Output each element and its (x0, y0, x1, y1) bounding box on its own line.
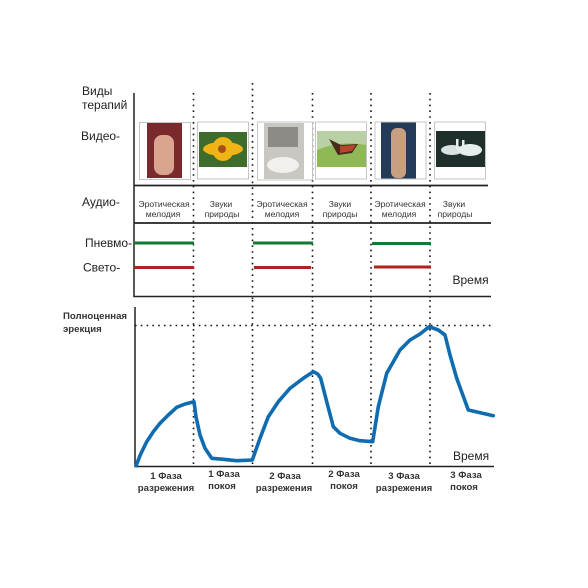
phase labels: разрежения (256, 483, 312, 494)
thumbnail 5: video frame (375, 122, 426, 179)
phase labels: 1 Фаза (150, 471, 182, 482)
audio captions: Звуки (210, 199, 232, 209)
audio captions: Звуки (329, 199, 351, 209)
label: pneumo: Пневмо- (85, 236, 132, 250)
thumbnail 1: video frame (140, 122, 190, 180)
audio captions: мелодия (382, 209, 417, 219)
phase labels: 3 Фаза (388, 471, 420, 482)
audio captions: природы (205, 209, 239, 219)
therapy chart axes (134, 93, 491, 296)
label: time, top chart: Время (452, 273, 489, 287)
response curve (136, 327, 493, 466)
phase labels: 1 Фаза (208, 469, 240, 480)
audio captions: природы (438, 209, 472, 219)
label: video: Видео- (81, 129, 120, 143)
audio captions: Эротическая (256, 199, 308, 209)
audio captions (138, 199, 472, 219)
phase labels: покоя (330, 481, 358, 492)
phase labels: 2 Фаза (269, 471, 301, 482)
heading: therapy types: терапий (82, 98, 127, 112)
audio captions: Эротическая (374, 199, 426, 209)
audio captions: мелодия (265, 209, 300, 219)
label: time, bottom chart: Время (453, 449, 489, 463)
audio captions: мелодия (146, 209, 181, 219)
pneumo bars (134, 242, 431, 245)
response chart axes (135, 307, 494, 466)
label: light: Свето- (83, 260, 120, 274)
light bars (134, 266, 431, 269)
phase labels (138, 469, 482, 494)
audio captions: природы (323, 209, 357, 219)
audio captions: Эротическая (138, 199, 190, 209)
audio captions: Звуки (443, 199, 465, 209)
dotted phase dividers (194, 83, 430, 467)
phase labels: 3 Фаза (450, 470, 482, 481)
phase labels: разрежения (376, 483, 432, 494)
thumbnail 2: flower (198, 122, 248, 179)
thumbnail 3: video frame (258, 122, 312, 180)
thumbnail 6: swans (434, 122, 486, 179)
phase labels: покоя (208, 481, 236, 492)
phase labels: разрежения (138, 483, 194, 494)
heading: therapy types: Виды (82, 84, 112, 98)
label: full erection: Полноценная (63, 311, 127, 322)
label: audio: Аудио- (82, 195, 120, 209)
thumbnail 4: butterfly (316, 122, 366, 179)
label: full erection: эрекция (63, 324, 102, 335)
phase labels: покоя (450, 482, 478, 493)
phase labels: 2 Фаза (328, 469, 360, 480)
